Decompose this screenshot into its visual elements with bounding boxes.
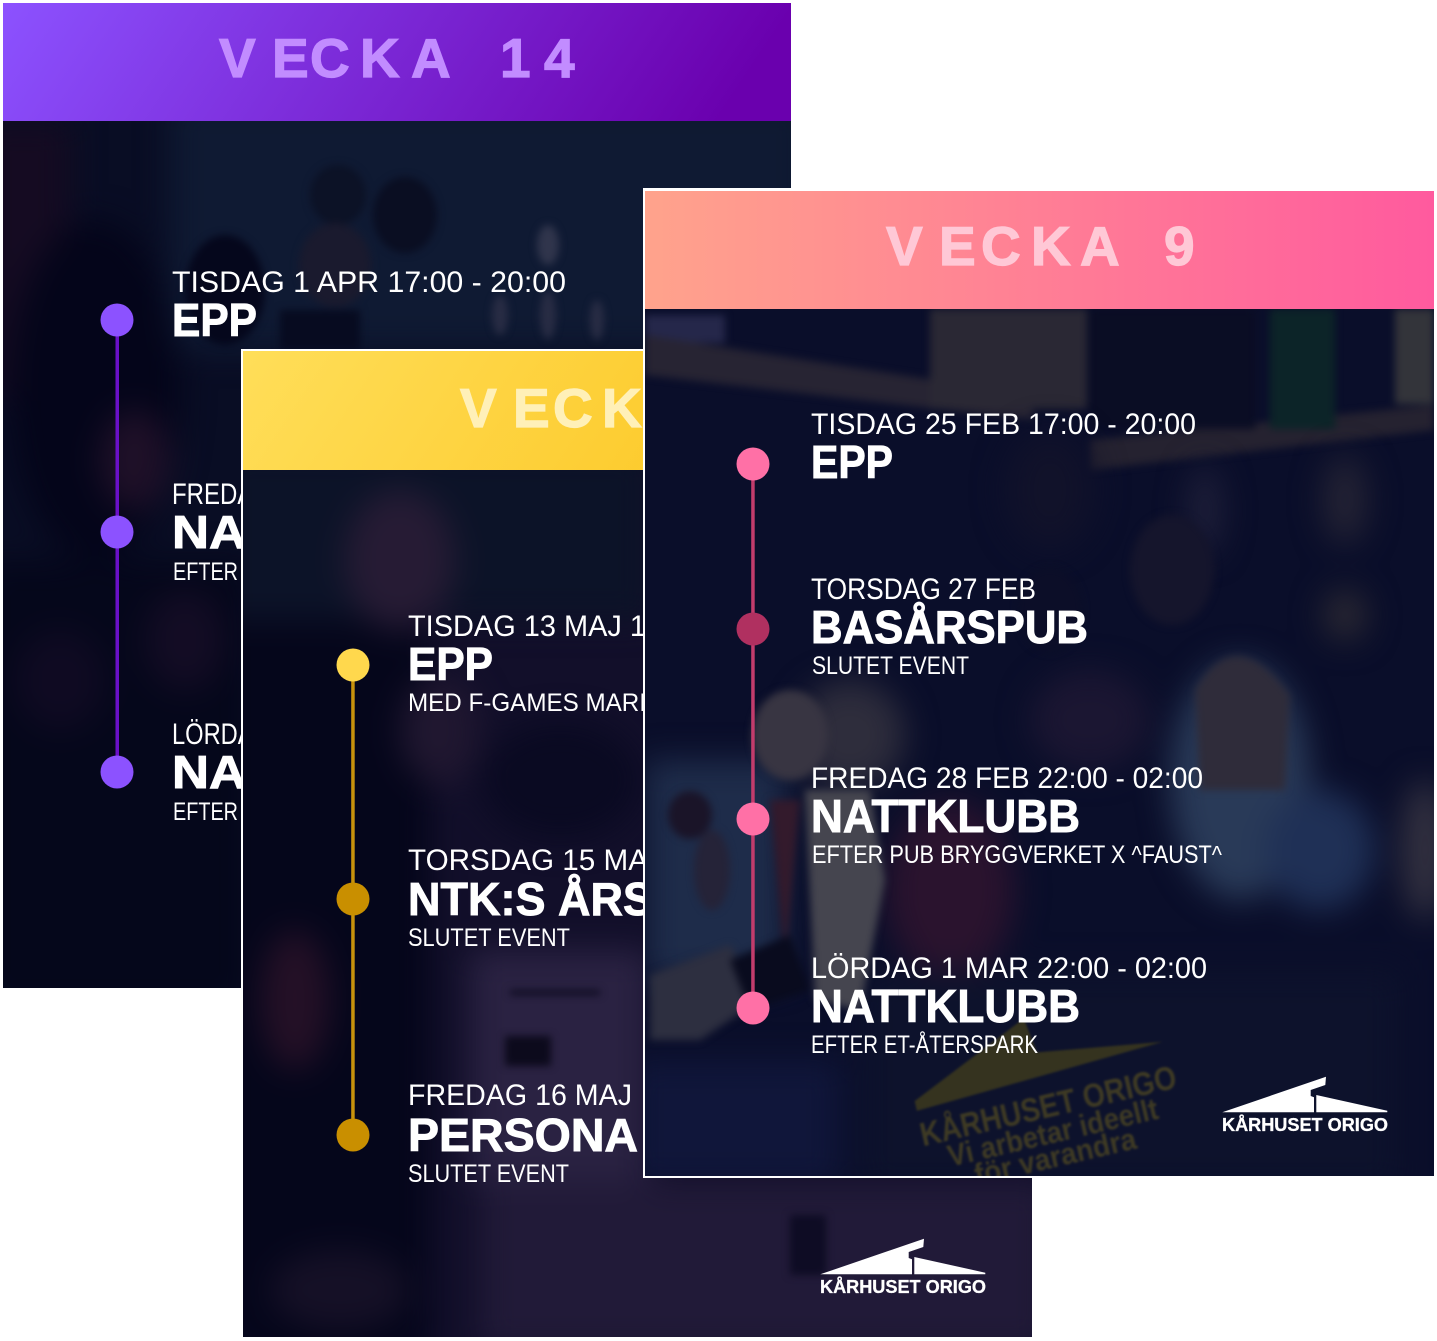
event: fredag: [172, 478, 272, 586]
event: lördag: LÖRDAG: [172, 718, 272, 751]
timeline: vecka 14: [100, 304, 134, 788]
event: torsdag 27 feb: SLUTET EVENT: [812, 652, 969, 680]
event: fredag: FREDAG: [172, 478, 272, 511]
header: vecka 14: [3, 3, 791, 121]
panel: yellow week: [220, 349, 1050, 1341]
header: vecka 9: [645, 191, 1434, 309]
event: lördag: [172, 718, 272, 826]
logo: kårhuset origo (yellow week): KÅRHUSET ORIGO: [820, 1276, 986, 1297]
event: tisdag 25 feb: TISDAG 25 FEB 17:00 - 20:00: [811, 408, 1196, 441]
logo: kårhuset origo (yellow week): [820, 1239, 986, 1297]
event: tisdag 25 feb: EPP: [811, 436, 893, 488]
event: lördag 1 mar: NATTKLUBB: [811, 980, 1080, 1032]
event: torsdag 27 feb: [811, 573, 1088, 680]
event: fredag 28 feb: [811, 762, 1222, 869]
timeline: yellow week: [336, 648, 370, 1152]
event: torsdag 15 maj: SLUTET EVENT: [408, 924, 570, 952]
event: fredag 16 maj: SLUTET EVENT: [408, 1160, 569, 1188]
event: tisdag 13 maj: TISDAG 13 MAJ 1: [408, 610, 646, 643]
panel: vecka 9: [630, 188, 1437, 1202]
header: yellow week: [243, 351, 1032, 470]
event: lördag 1 mar: EFTER ET-ÅTERSPARK: [811, 1029, 1038, 1059]
event: torsdag 15 maj: NTK:S ÅRS: [408, 873, 653, 925]
event: lördag: EFTER: [173, 798, 238, 826]
event: tisdag 13 maj: [408, 610, 646, 717]
event: torsdag 27 feb: BASÅRSPUB: [811, 601, 1088, 653]
event: fredag 16 maj: PERSONA: [408, 1109, 638, 1161]
header: vecka 14: VECKA 14: [219, 27, 575, 89]
event: fredag: EFTER: [173, 558, 238, 586]
panel: vecka 14: [0, 3, 810, 1010]
photo background: vecka 9: [630, 309, 1437, 1202]
card border: yellow week: [241, 349, 1034, 1339]
logo: kårhuset origo: [1222, 1077, 1388, 1135]
timeline: vecka 9: [736, 448, 770, 1024]
shirt print: KÅRHUSET ORIGO: [916, 1058, 1180, 1153]
event: fredag 28 feb: NATTKLUBB: [811, 790, 1080, 842]
shirt print: Vi arbetar ideellt: [944, 1091, 1161, 1174]
event: tisdag 13 maj: EPP: [408, 638, 493, 690]
card border: vecka 9: [643, 188, 1437, 1178]
event: torsdag 27 feb: TORSDAG 27 FEB: [811, 573, 1036, 606]
event: fredag: NA: [172, 506, 246, 558]
header: yellow week: VECK: [460, 377, 642, 439]
event: fredag 16 maj: [408, 1079, 638, 1188]
event: fredag 28 feb: FREDAG 28 FEB 22:00 - 02:00: [811, 762, 1203, 795]
event: torsdag 15 maj: [408, 844, 653, 952]
event: tisdag 25 feb: [811, 408, 1196, 488]
event: lördag 1 mar: [811, 952, 1207, 1059]
event: tisdag 1 apr: TISDAG 1 APR 17:00 - 20:00: [172, 266, 566, 299]
event: fredag 16 maj: FREDAG 16 MAJ: [408, 1079, 632, 1112]
photo background: vecka 14: [0, 100, 810, 1010]
event: lördag: NA: [172, 746, 246, 798]
header: vecka 9: VECKA 9: [886, 215, 1195, 277]
event: lördag 1 mar: LÖRDAG 1 MAR 22:00 - 02:00: [811, 952, 1207, 985]
event: tisdag 1 apr: [172, 266, 566, 346]
event: tisdag 1 apr: EPP: [172, 294, 257, 346]
shirt print: [914, 1022, 1176, 1176]
event: torsdag 15 maj: TORSDAG 15 MA: [408, 844, 648, 877]
shirt print: för varandra: [971, 1121, 1140, 1192]
logo: kårhuset origo: KÅRHUSET ORIGO: [1222, 1114, 1388, 1135]
photo background: yellow week: [220, 450, 1050, 1341]
event: fredag 28 feb: EFTER PUB BRYGGVERKET X ^FAUST^: [812, 841, 1222, 869]
event: tisdag 13 maj: MED F-GAMES MARI: [408, 689, 646, 717]
